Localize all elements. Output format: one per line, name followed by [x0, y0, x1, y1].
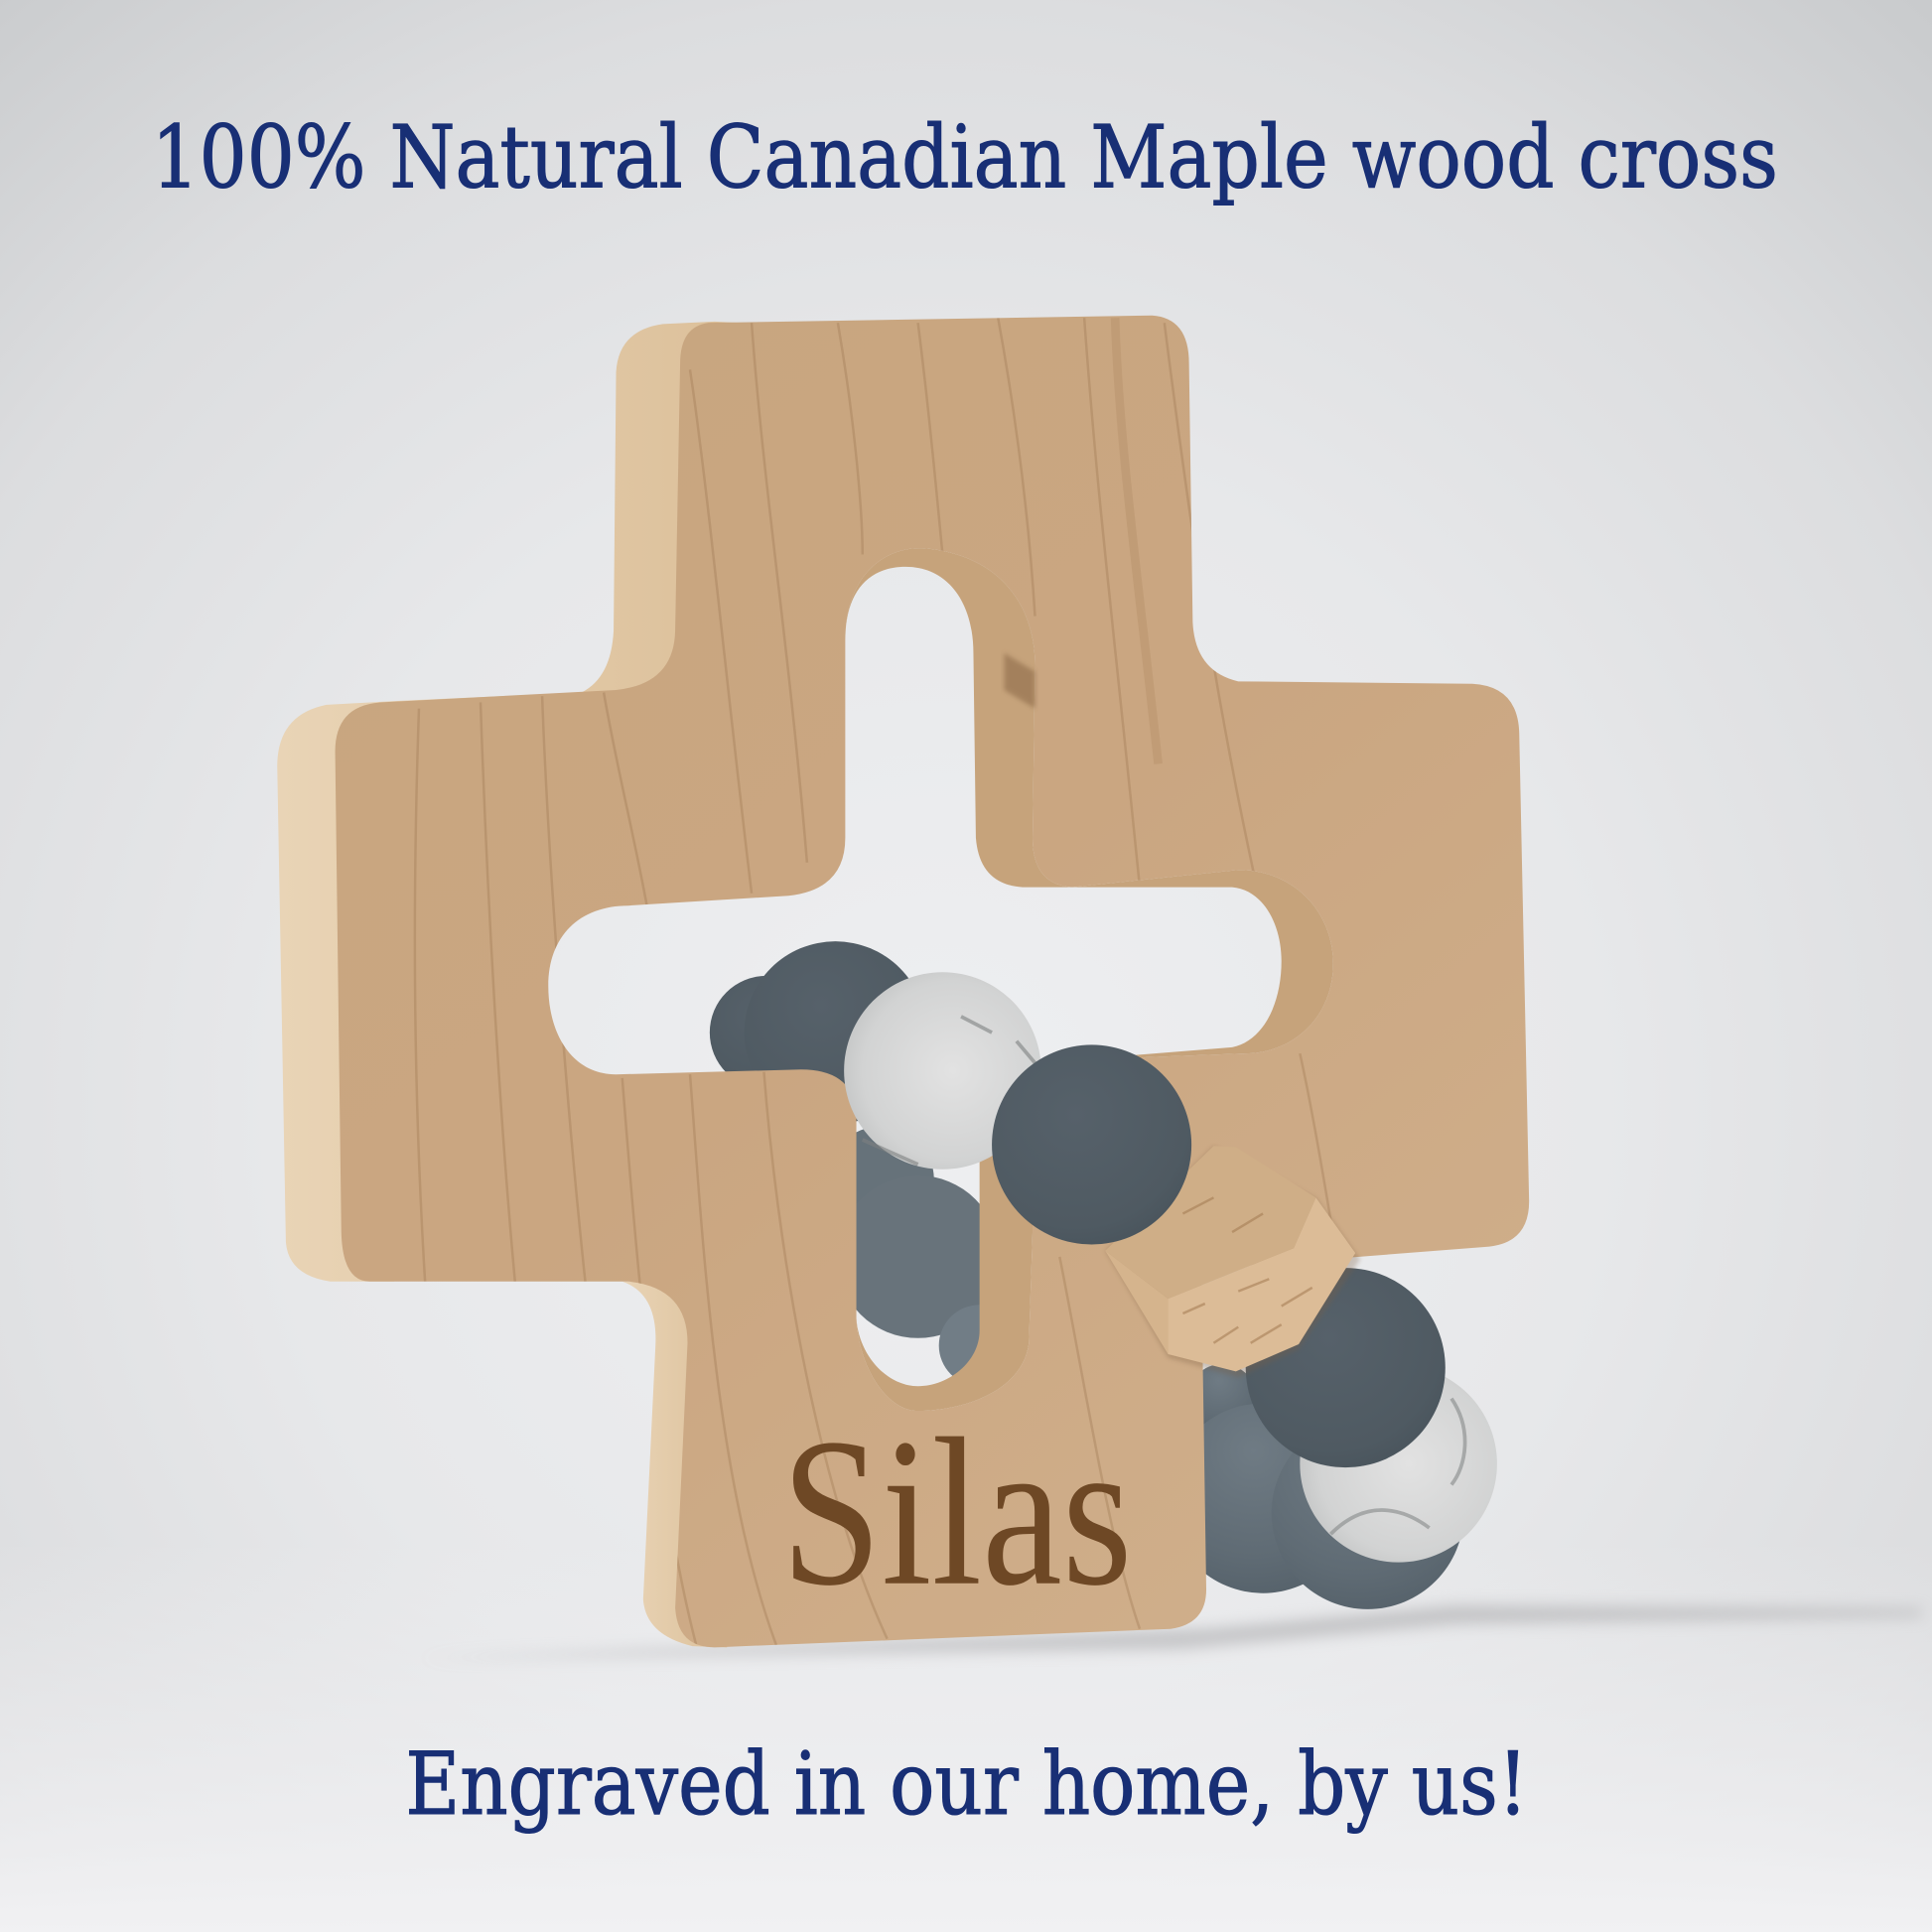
hexagon front face	[1169, 1197, 1355, 1371]
bead: dark upper	[992, 1044, 1191, 1244]
bead: lower right back small	[1187, 1364, 1257, 1433]
bead: dark lower	[1246, 1268, 1446, 1467]
bead: lower slot upper	[828, 1126, 934, 1232]
bead: lower slot large	[837, 1175, 1000, 1338]
hexagon lower left face	[1105, 1251, 1169, 1354]
beads behind the cross	[710, 941, 1358, 1593]
bead: lower back	[1272, 1417, 1463, 1609]
heading: bottom: Engraved in our home, by us!	[405, 1734, 1528, 1835]
cross hole inner wall	[548, 548, 1333, 1411]
bead: marble upper	[844, 972, 1041, 1170]
floor shadow	[419, 1605, 1922, 1658]
cross front face	[336, 316, 1529, 1647]
engraved name: Silas	[781, 1396, 1133, 1630]
dark knot in slot wall	[1004, 653, 1035, 709]
wooden cross	[277, 316, 1529, 1647]
bead: back small	[710, 976, 823, 1089]
bead: back dark	[745, 941, 926, 1124]
beads in front of the cross	[844, 972, 1497, 1609]
hexagon soft shadow	[1105, 1146, 1360, 1378]
cross side edge: left and top	[277, 322, 740, 1647]
bead: lower slot small	[939, 1305, 1021, 1386]
bead: wooden hexagon	[1105, 1146, 1360, 1378]
wood grain	[415, 318, 1337, 1645]
bead: lower right back	[1169, 1404, 1358, 1593]
hexagon top face	[1105, 1146, 1315, 1299]
bead: marble lower	[1300, 1365, 1497, 1563]
